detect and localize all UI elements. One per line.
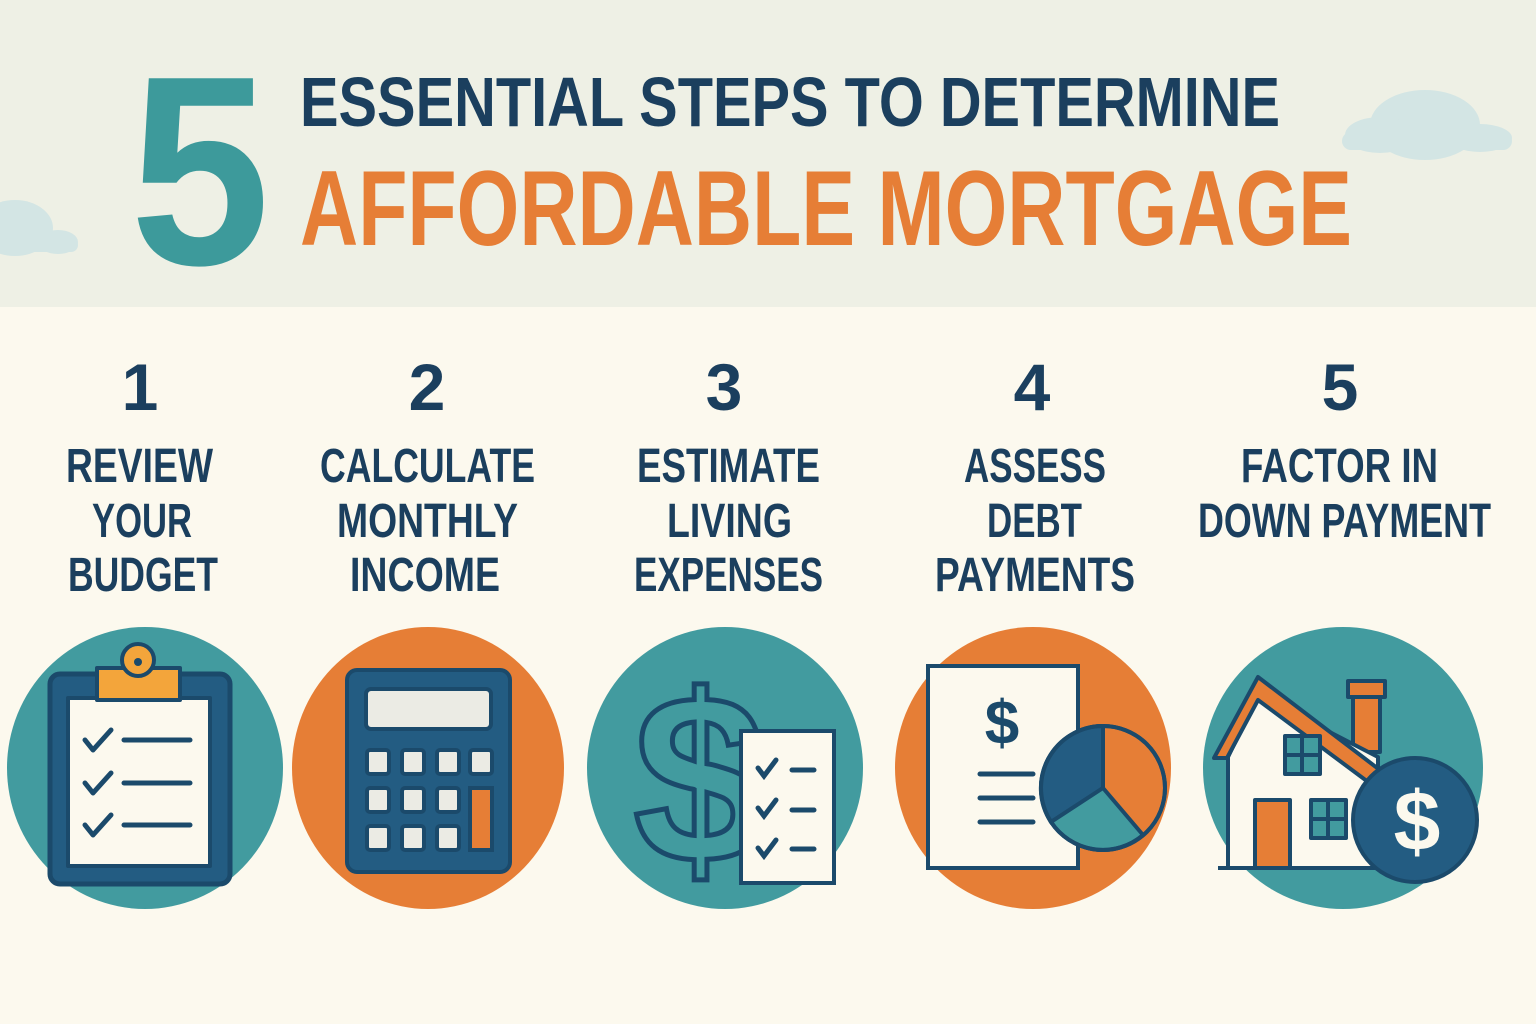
step labels: LIVING [667, 495, 792, 548]
step labels: REVIEW [66, 440, 214, 493]
step numbers: 3 [706, 350, 742, 424]
icon: dollar with checklist [587, 627, 863, 913]
step labels: PAYMENTS [935, 549, 1135, 602]
icon: document with pie chart [895, 627, 1171, 909]
step numbers: 4 [1014, 350, 1051, 424]
step labels: BUDGET [68, 549, 218, 602]
step labels: ESTIMATE [637, 440, 820, 493]
icon: document with pie chart: $ [985, 689, 1019, 758]
step numbers [122, 350, 1358, 424]
step labels: YOUR [92, 495, 192, 548]
icon: clipboard [7, 627, 283, 909]
step labels: ASSESS [964, 440, 1106, 493]
step labels [66, 440, 1491, 602]
cloud left [0, 200, 78, 256]
icon: house with coin [1203, 627, 1483, 909]
step labels: MONTHLY [337, 495, 518, 548]
title line 1: ESSENTIAL STEPS TO DETERMINE [300, 63, 1280, 141]
step labels: EXPENSES [634, 549, 823, 602]
icon: house with coin: $ [1394, 774, 1440, 868]
step labels: DEBT [987, 495, 1082, 548]
step numbers: 1 [122, 350, 158, 424]
step labels: FACTOR IN [1241, 440, 1438, 493]
step numbers: 2 [409, 350, 445, 424]
icon: calculator [292, 627, 564, 909]
step numbers: 5 [1322, 350, 1358, 424]
step labels: INCOME [350, 549, 500, 602]
step labels: CALCULATE [320, 440, 535, 493]
cloud right [1342, 90, 1512, 160]
title number 5: 5 [130, 21, 270, 322]
icon: dollar with checklist: $ [633, 645, 767, 913]
